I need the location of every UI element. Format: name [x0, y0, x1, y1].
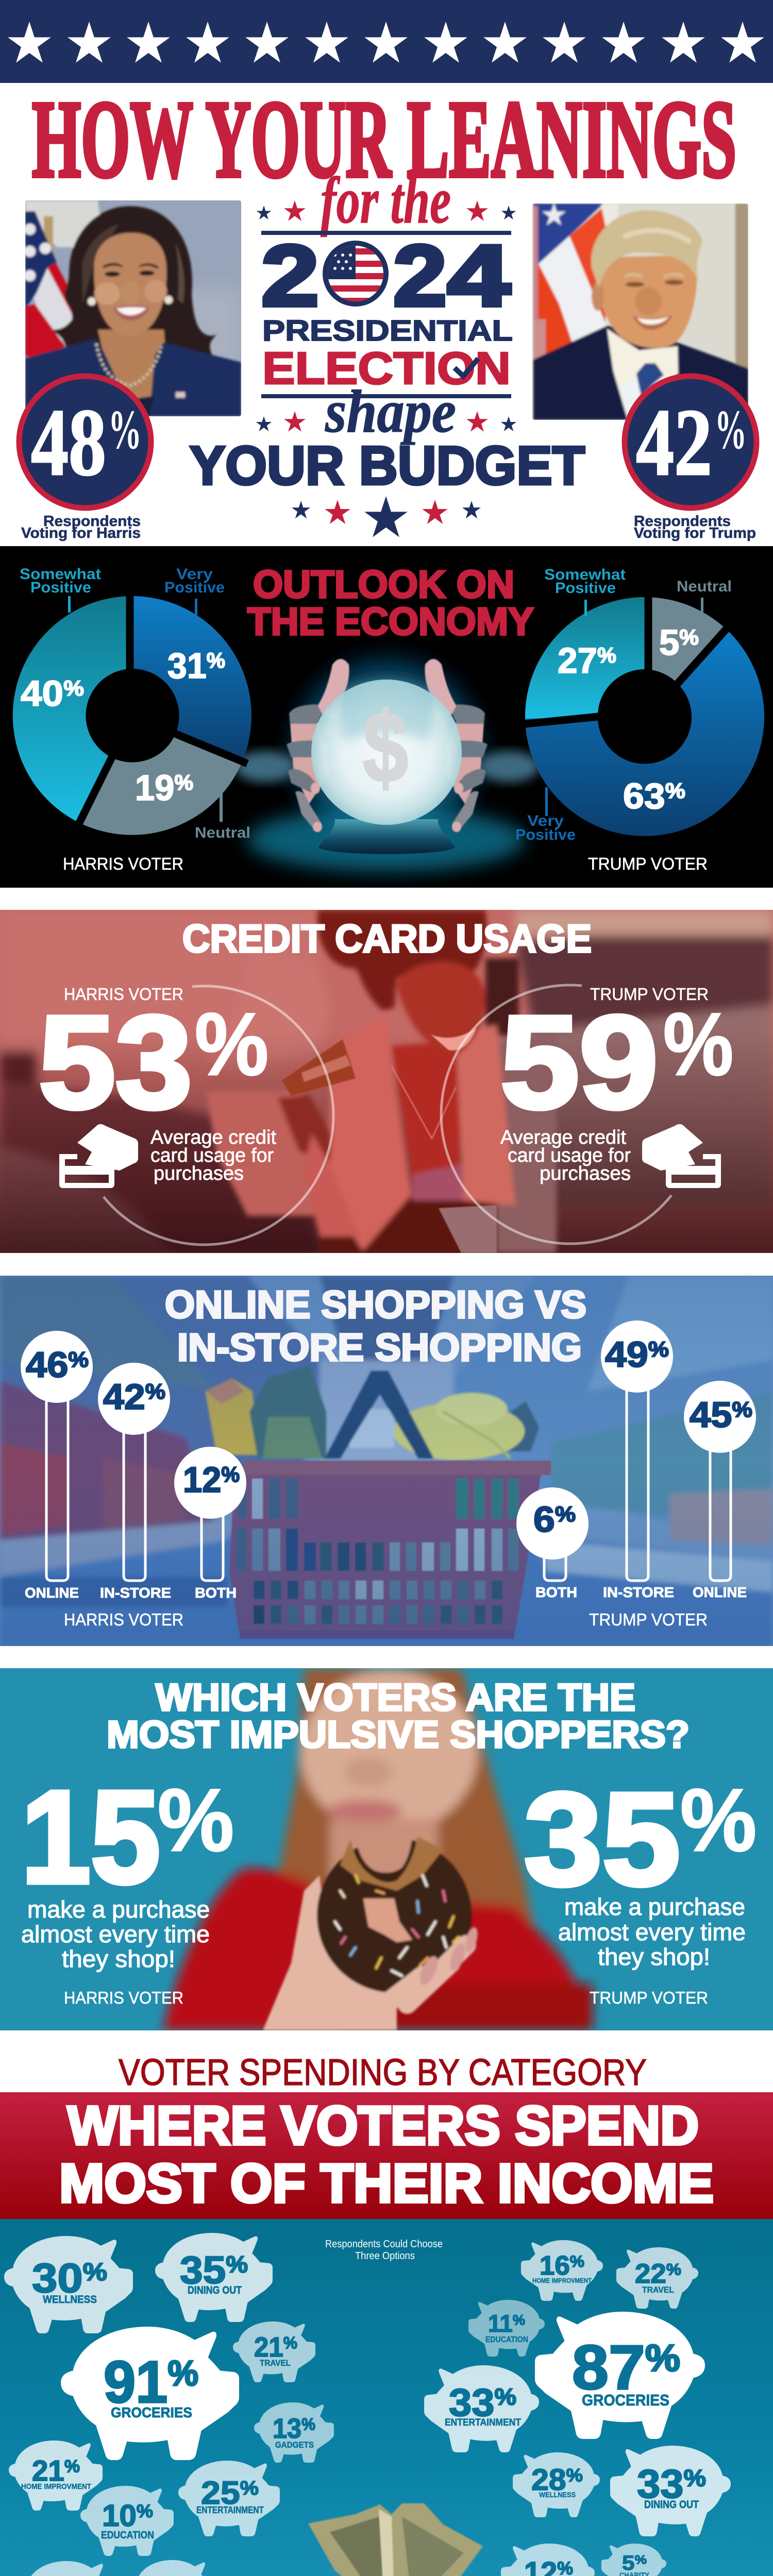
pig: Trump entertainment 33% — [424, 2365, 539, 2452]
text: Trump impulsive purchase caption: they shop! — [598, 1943, 710, 1970]
pig: Trump groceries 87%: GROCERIES — [582, 2391, 669, 2409]
text: Harris impulsive purchase caption: they shop! — [62, 1945, 175, 1972]
bar: Trump in-store 49%: IN-STORE — [603, 1584, 674, 1600]
pig: Trump education 11%: EDUCATION — [485, 2335, 528, 2344]
pig: Trump groceries 87%: % — [645, 2337, 680, 2379]
chart: Harris voter outlook donut: 19 — [135, 768, 175, 808]
pig: Trump education 11% — [468, 2300, 545, 2357]
pig: Trump wellness 28%: 28 — [531, 2463, 565, 2497]
caption: respondents voting for Trump: Respondents — [634, 513, 731, 530]
center lockup: for the 2024 presidential election — [257, 164, 516, 398]
label: Trump voter: TRUMP VOTER — [590, 985, 709, 1004]
pig: Trump dining out 33%: 33 — [637, 2461, 682, 2506]
pig: Trump charity 5%: % — [634, 2553, 647, 2567]
chart: Trump voter outlook donut: 63 — [623, 776, 663, 816]
pig: Harris fashion 12% — [21, 2561, 115, 2576]
bar: Trump online 45%: % — [732, 1397, 752, 1421]
stat: Harris 15%: 15 — [21, 1764, 160, 1911]
illustration: grocery aisle and basket — [0, 1276, 773, 1646]
caption: respondents voting for Harris — [21, 513, 141, 541]
pig: Trump education 11%: % — [513, 2311, 525, 2328]
badge: Harris 48%: 48 — [31, 389, 106, 496]
banner: where voters spend most of their income: MOST OF THEIR INCOME — [59, 2153, 714, 2214]
text: respondents could choose three options: Respondents Could Choose — [325, 2239, 443, 2250]
badge: Harris 48% — [19, 376, 151, 508]
pig: Harris entertainment 25%: 25 — [201, 2475, 237, 2511]
bar: Trump both 6%: % — [555, 1502, 576, 1526]
pig: Trump entertainment 33%: 33 — [449, 2381, 492, 2424]
caption: respondents voting for Harris: Respondents — [43, 513, 141, 530]
text: average credit card usage (Trump) — [500, 1127, 631, 1184]
chart: Trump voter outlook donut: % — [665, 778, 685, 803]
heading: online shopping vs in-store shopping: IN-STORE SHOPPING — [177, 1326, 582, 1369]
caption: respondents voting for Trump: Voting for Trump — [634, 525, 756, 541]
heading: outlook on the economy: OUTLOOK ON — [253, 563, 514, 606]
heading: credit card usage: CREDIT CARD USAGE — [182, 917, 592, 961]
caption: respondents voting for Harris: Voting for Harris — [21, 525, 141, 541]
chart: Trump voter outlook donut: % — [679, 625, 699, 649]
label: Harris voter: HARRIS VOTER — [63, 854, 183, 873]
text: Harris impulsive purchase caption: almost every time — [21, 1921, 210, 1947]
pig: Harris travel 21% — [233, 2321, 315, 2382]
label: Trump somewhat positive: Somewhat — [544, 566, 626, 583]
pig: Trump groceries 87% — [535, 2312, 705, 2439]
pig: Harris entertainment 25%: ENTERTAINMENT — [196, 2505, 264, 2515]
text: respondents could choose three options: Three Options — [355, 2250, 415, 2262]
banner: where voters spend most of their income: WHERE VOTERS SPEND — [68, 2095, 699, 2156]
label: Harris voter: HARRIS VOTER — [64, 1610, 183, 1629]
pig: Harris home improvement 21%: 21 — [32, 2454, 64, 2487]
panel: online vs in-store shopping — [0, 1276, 773, 1646]
illustration: crystal ball with hands — [234, 641, 540, 872]
stat: Trump 59%: 59 — [500, 989, 658, 1136]
chart: Harris voter outlook donut: 31 — [167, 646, 208, 686]
label: Trump neutral — [678, 580, 731, 612]
pig: Harris dining out 35% — [155, 2233, 273, 2322]
pig: Trump home improvement 16%: 16 — [540, 2251, 569, 2281]
text: average credit card usage (Harris): purchases — [154, 1163, 244, 1184]
pig: Harris wellness 30%: % — [83, 2259, 107, 2286]
pig: Trump travel 22% — [616, 2247, 698, 2309]
pig: Harris gadgets 13%: 13 — [273, 2413, 304, 2444]
label: Trump very positive: Positive — [515, 826, 576, 843]
photo: Trump portrait — [532, 203, 748, 420]
bar: Trump online 45%: ONLINE — [693, 1584, 747, 1600]
heading: outlook on the economy — [247, 563, 534, 643]
header star banner — [0, 0, 773, 83]
label: Harris voter: HARRIS VOTER — [64, 1988, 183, 2007]
stat: Trump 35% — [524, 1766, 757, 1913]
pig: Harris gadgets 13%: GADGETS — [275, 2440, 314, 2450]
pig: Harris home improvement 21%: % — [64, 2457, 80, 2477]
panel: spending by category piggy banks — [0, 2219, 773, 2576]
pig: Harris dining out 35%: % — [226, 2251, 248, 2277]
bar: Harris online 46%: ONLINE — [25, 1585, 79, 1601]
heading: online shopping vs in-store shopping: ONLINE SHOPPING VS — [165, 1283, 586, 1326]
pig: Trump entertainment 33%: % — [495, 2383, 516, 2410]
label: Harris very positive — [164, 566, 225, 616]
lockup: shape your budget: YOUR BUDGET — [190, 435, 585, 496]
text: Trump impulsive purchase caption: almost every time — [558, 1919, 746, 1945]
pig: Trump wellness 28%: % — [566, 2465, 583, 2485]
pig: Trump education 11%: 11 — [488, 2310, 514, 2337]
pig: Harris groceries 91%: GROCERIES — [111, 2404, 192, 2420]
pig: Harris wellness 30% — [4, 2236, 133, 2333]
stat: Trump 59%: % — [663, 995, 733, 1094]
label: Harris neutral: Neutral — [195, 824, 250, 841]
bar: Harris in-store 42%: % — [145, 1379, 165, 1403]
text: average credit card usage (Trump): Average credit — [500, 1127, 626, 1148]
center lockup: for the 2024 presidential election: 4 — [447, 227, 510, 324]
icon: hand with credit card (Harris) — [59, 1124, 138, 1188]
stat: Trump 35%: 35 — [524, 1766, 680, 1913]
heading: which voters are the most impulsive shoppers — [107, 1676, 690, 1756]
chart: Harris voter outlook donut — [13, 592, 251, 835]
badge: Trump 42% — [625, 376, 757, 508]
center lockup: for the 2024 presidential election: 2 — [261, 227, 319, 324]
lockup: shape your budget: shape — [325, 378, 456, 445]
label: Trump somewhat positive: Positive — [555, 580, 616, 597]
chart: Harris voter outlook donut: 40 — [21, 673, 61, 714]
label: Trump very positive: Very — [527, 812, 564, 829]
bar: Trump in-store 49% — [601, 1320, 674, 1600]
pig: Harris home improvement 21% — [9, 2441, 103, 2511]
bar: Trump online 45%: 45 — [690, 1395, 730, 1435]
text: average credit card usage (Harris): Average credit — [150, 1127, 276, 1148]
pig: Trump home improvement 16%: % — [570, 2252, 584, 2270]
pig: Trump dining out 33%: DINING OUT — [644, 2499, 699, 2511]
pig: Harris dining out 35%: DINING OUT — [188, 2284, 242, 2296]
pig: Trump charity 5%: 5 — [622, 2552, 633, 2574]
heading: online shopping vs in-store shopping — [165, 1283, 586, 1369]
pig: Trump home improvement 16% — [521, 2240, 603, 2301]
pig: Harris travel 21%: 21 — [254, 2332, 285, 2363]
bar: Harris online 46%: 46 — [26, 1345, 66, 1385]
heading: which voters are the most impulsive shoppers: WHICH VOTERS ARE THE — [156, 1676, 635, 1719]
bar: Harris in-store 42%: IN-STORE — [100, 1585, 171, 1601]
pig: Trump groceries 87%: 87 — [572, 2332, 642, 2402]
stat: Harris 15% — [21, 1764, 234, 1911]
bar: Harris online 46% — [21, 1331, 93, 1601]
stat: Harris 53% — [39, 989, 268, 1136]
text: average credit card usage (Harris): card usage for — [150, 1145, 274, 1166]
pig: Trump travel 22%: TRAVEL — [642, 2285, 674, 2295]
label: Harris somewhat positive: Positive — [30, 579, 91, 596]
center lockup: for the 2024 presidential election: ELECTION — [262, 343, 511, 394]
pig: Harris wellness 30%: WELLNESS — [43, 2294, 97, 2306]
pig: Harris groceries 91%: 91 — [104, 2349, 170, 2415]
label: Harris somewhat positive: Somewhat — [20, 566, 101, 583]
pig: Trump dining out 33%: % — [684, 2465, 706, 2492]
pig: Harris dining out 35%: 35 — [180, 2248, 223, 2292]
center lockup: for the 2024 presidential election: for the — [321, 164, 451, 237]
chart: Trump voter outlook donut: 5 — [659, 622, 679, 663]
bar: Harris online 46%: % — [68, 1347, 89, 1371]
pig: Harris groceries 91%: % — [167, 2353, 198, 2393]
stat: Trump 35%: % — [680, 1771, 757, 1870]
text: Harris impulsive purchase caption — [21, 1896, 210, 1972]
pig: Trump dining out 33% — [610, 2446, 731, 2536]
pig: Harris wellness 30%: 30 — [32, 2255, 78, 2301]
pig: Harris charity 5% — [131, 2560, 216, 2576]
label: Trump neutral: Neutral — [677, 578, 732, 595]
pig: Harris gadgets 13%: % — [301, 2415, 315, 2433]
bar: Harris in-store 42% — [98, 1363, 171, 1601]
bar: Harris both 12%: % — [221, 1462, 240, 1486]
photo: Harris portrait — [24, 200, 241, 416]
text: average credit card usage (Trump): card usage for — [508, 1145, 631, 1166]
lockup: shape your budget — [190, 378, 585, 537]
label: Trump very positive — [515, 787, 576, 843]
bar: Trump in-store 49%: 49 — [605, 1334, 645, 1375]
badge: Harris 48%: % — [108, 399, 142, 461]
label: Trump voter: TRUMP VOTER — [589, 1610, 708, 1629]
heading: which voters are the most impulsive shoppers: MOST IMPULSIVE SHOPPERS? — [107, 1713, 690, 1756]
caption: respondents voting for Trump — [634, 513, 756, 541]
pig: Harris travel 21%: TRAVEL — [260, 2358, 291, 2368]
pig: Trump entertainment 33%: ENTERTAINMENT — [445, 2417, 521, 2428]
label: Harris very positive: Very — [176, 566, 213, 583]
heading: outlook on the economy: THE ECONOMY — [247, 600, 534, 643]
label: Harris voter: HARRIS VOTER — [64, 985, 183, 1004]
label: Harris neutral — [196, 793, 249, 838]
stat: Harris 53%: % — [195, 995, 268, 1094]
label: Trump voter: TRUMP VOTER — [588, 854, 708, 873]
chart: Harris voter outlook donut: % — [207, 648, 225, 672]
pig: Trump gadgets 12% — [501, 2544, 595, 2576]
chart: Trump voter outlook donut: 27 — [558, 640, 598, 681]
pig: Harris travel 21%: % — [283, 2333, 297, 2352]
label: Harris somewhat positive — [20, 566, 101, 613]
illustration: piggy bank with dollar bill — [242, 2503, 537, 2576]
pig: Trump charity 5% — [601, 2544, 666, 2576]
bar: Trump both 6% — [516, 1487, 589, 1600]
text: respondents could choose three options — [325, 2239, 443, 2262]
label: Trump voter: TRUMP VOTER — [590, 1988, 708, 2007]
chart: Trump voter outlook donut — [520, 592, 764, 836]
bar: Harris in-store 42%: 42 — [103, 1377, 143, 1417]
heading: voter spending by category: VOTER SPENDING BY CATEGORY — [119, 2052, 647, 2093]
label: Trump somewhat positive — [544, 566, 626, 616]
pig: Harris entertainment 25%: % — [240, 2478, 259, 2499]
bar: Trump in-store 49%: % — [648, 1337, 669, 1361]
bar: Trump both 6%: BOTH — [535, 1584, 577, 1600]
pig: Trump wellness 28%: WELLNESS — [539, 2490, 576, 2499]
pig: Harris home improvement 21%: HOME IMPROVMENT — [21, 2482, 91, 2491]
stat: Trump 59% — [500, 989, 733, 1136]
label: Harris very positive: Positive — [164, 579, 225, 596]
stat: Harris 15%: % — [158, 1771, 234, 1870]
chart: Trump voter outlook donut: % — [597, 643, 616, 667]
pig: Trump travel 22%: 22 — [635, 2259, 665, 2289]
banner: where voters spend most of their income — [0, 2092, 773, 2219]
stat: Harris 53%: 53 — [39, 989, 192, 1136]
pig: Trump travel 22%: % — [666, 2260, 681, 2279]
pig: Harris entertainment 25% — [178, 2461, 280, 2536]
center lockup: for the 2024 presidential election: PRESIDENTIAL — [262, 314, 513, 347]
pig: Harris groceries 91% — [61, 2327, 239, 2460]
pig: Trump wellness 28% — [513, 2452, 600, 2517]
pig: Harris education 10%: % — [137, 2501, 153, 2521]
pig: Trump home improvement 16%: HOME IMPROVMENT — [532, 2277, 592, 2284]
panel: outlook on the economy — [0, 546, 773, 888]
text: Trump impulsive purchase caption: make a purchase — [564, 1893, 745, 1920]
center lockup: for the 2024 presidential election: 2 — [393, 227, 447, 324]
bar: Harris both 12%: BOTH — [195, 1585, 237, 1601]
chart: Harris voter outlook donut: % — [63, 676, 84, 700]
pig: Harris education 10%: EDUCATION — [101, 2530, 154, 2541]
icon: hand with credit card (Trump) — [642, 1124, 721, 1188]
chart: Harris voter outlook donut: % — [174, 770, 193, 794]
illustration: woman holding bitten doughnut — [163, 1668, 593, 2030]
text: Trump impulsive purchase caption — [558, 1893, 746, 1970]
bar: Harris both 12% — [174, 1447, 246, 1601]
illustration: crystal ball with hands: $ — [363, 691, 408, 804]
pig: Harris gadgets 13% — [254, 2402, 334, 2463]
pig: Harris education 10%: 10 — [102, 2499, 136, 2533]
badge: Trump 42%: % — [715, 399, 747, 461]
bar: Harris both 12%: 12 — [183, 1460, 223, 1500]
panel: most impulsive shoppers — [0, 1668, 773, 2030]
panel: credit card usage — [0, 910, 773, 1253]
text: average credit card usage (Trump): purchases — [540, 1163, 631, 1184]
bar: Trump both 6%: 6 — [533, 1499, 553, 1539]
text: average credit card usage (Harris) — [150, 1127, 276, 1184]
pig: Harris education 10% — [80, 2486, 174, 2556]
bar: Trump online 45% — [684, 1381, 756, 1600]
text: Harris impulsive purchase caption: make a purchase — [27, 1896, 210, 1923]
decorative arcs — [104, 986, 333, 1245]
badge: Trump 42%: 42 — [636, 389, 712, 496]
